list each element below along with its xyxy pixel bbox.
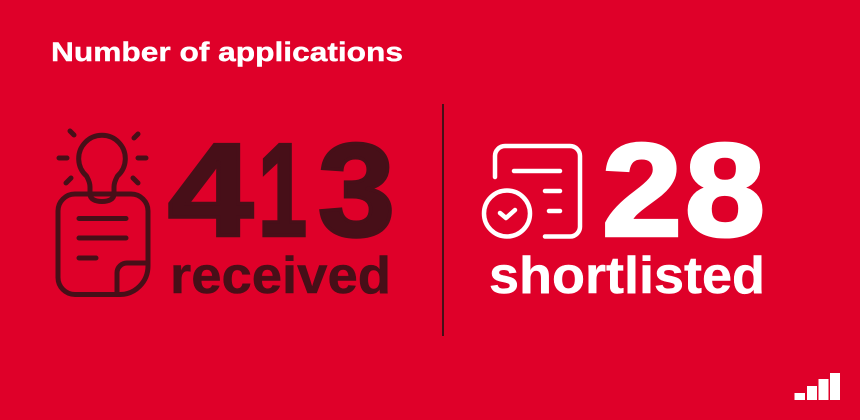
title: Number of applications bbox=[51, 37, 403, 67]
number: 28: 2 bbox=[602, 116, 682, 264]
number: 28: 8 bbox=[685, 116, 765, 264]
label: received: received bbox=[170, 247, 391, 305]
label: shortlisted: shortlisted bbox=[489, 247, 765, 305]
number: 413: 4 bbox=[168, 116, 253, 264]
divider bbox=[442, 104, 444, 336]
number: 413: 3 bbox=[318, 116, 395, 264]
logo: bars bbox=[794, 373, 840, 400]
icon: lightbulb and note bbox=[58, 131, 148, 294]
icon: checklist document bbox=[484, 146, 580, 236]
number: 413: 1 bbox=[258, 116, 307, 264]
number: 413 bbox=[168, 116, 395, 264]
number: 28 bbox=[602, 116, 765, 264]
